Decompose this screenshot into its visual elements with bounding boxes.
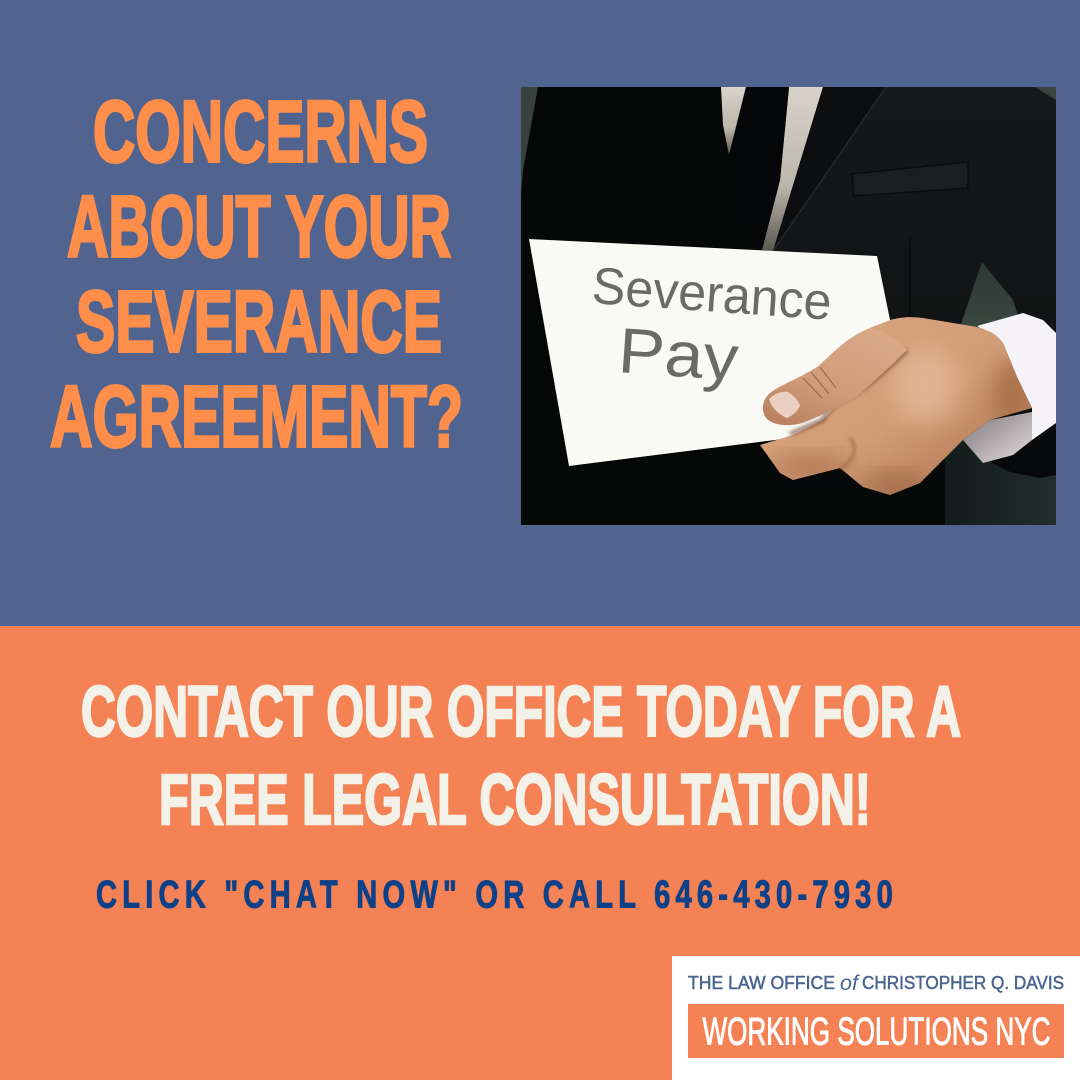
panel: orange bottom background (0, 626, 1080, 1080)
handwriting: severance pay (594, 268, 830, 392)
logo firm name: THE LAW OFFICE (688, 973, 835, 993)
logo firm name (688, 972, 1064, 995)
shirt cuff (963, 313, 1056, 463)
heading: concerns about your severance agreement: CONCERNS (93, 82, 428, 180)
heading: concerns about your severance agreement (50, 82, 463, 466)
suit lapels (773, 87, 968, 320)
heading: concerns about your severance agreement: SEVERANCE (76, 272, 442, 370)
background behind arm (960, 262, 1020, 327)
handwriting: severance pay: Pay (616, 314, 741, 394)
heading: concerns about your severance agreement: ABOUT YOUR (67, 178, 451, 276)
logo firm name: CHRISTOPHER Q. DAVIS (862, 973, 1064, 993)
shirt collar and tie (721, 87, 823, 251)
call to action heading (81, 672, 961, 840)
envelope (529, 239, 900, 466)
logo: law office of christopher q. davis (672, 956, 1080, 1080)
heading: concerns about your severance agreement: AGREEMENT? (50, 368, 463, 466)
right sleeve (990, 440, 1056, 478)
hand (760, 317, 1032, 495)
panel: blue top background (0, 0, 1080, 626)
photo: hand holding severance pay envelope (521, 87, 1056, 525)
handwriting: severance pay: Severance (590, 257, 834, 332)
logo firm name: of (840, 972, 860, 995)
right suit body (774, 87, 1056, 332)
